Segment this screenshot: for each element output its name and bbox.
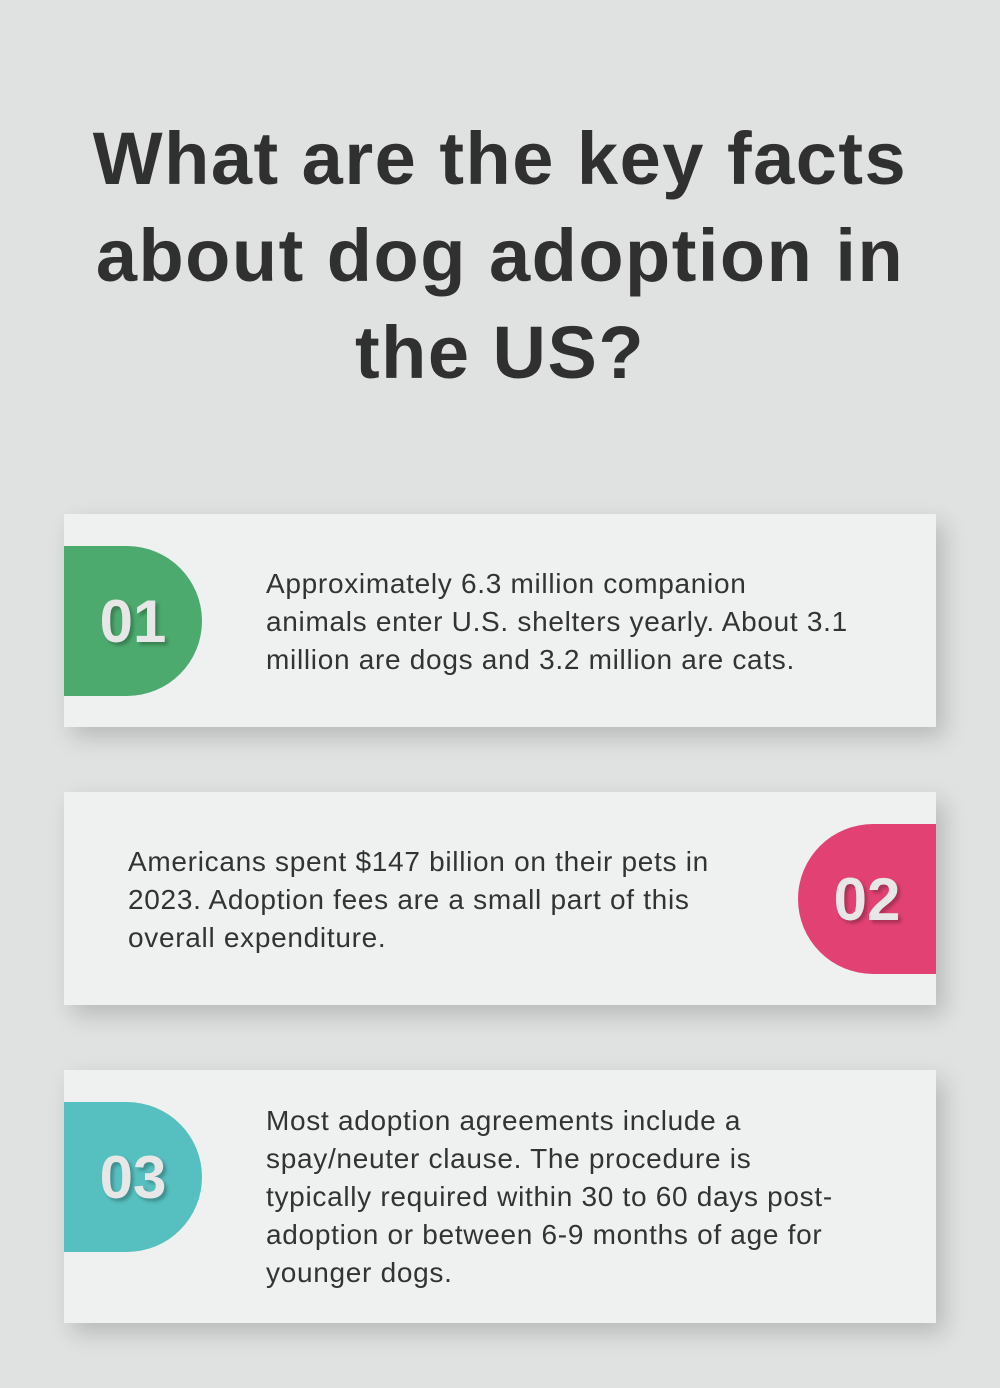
text 3: Most adoption agreements include a	[266, 1105, 741, 1136]
text 3: spay/neuter clause. The procedure is	[266, 1143, 751, 1174]
badge 03: 03	[100, 1144, 166, 1210]
panel: fact 1	[64, 514, 936, 727]
badge 02: 02	[834, 866, 900, 932]
text 3	[266, 1105, 833, 1288]
text 1: million are dogs and 3.2 million are cats.	[266, 644, 795, 675]
badge 03	[64, 1102, 202, 1252]
text 1	[266, 568, 848, 675]
badge 01: 01	[100, 588, 166, 654]
panel: fact 3	[64, 1070, 936, 1323]
text 2: Americans spent $147 billion on their pets in	[128, 846, 709, 877]
title: the US?	[355, 311, 645, 394]
title: about dog adoption in	[96, 214, 904, 297]
text 3: adoption or between 6-9 months of age for	[266, 1219, 822, 1250]
text 2: 2023. Adoption fees are a small part of this	[128, 884, 690, 915]
badge 01	[64, 546, 202, 696]
text 1: Approximately 6.3 million companion	[266, 568, 746, 599]
text 2: overall expenditure.	[128, 922, 386, 953]
title	[92, 117, 907, 394]
panel: fact 2	[64, 792, 936, 1005]
title: What are the key facts	[93, 117, 907, 200]
badge 02	[798, 824, 936, 974]
text 3: typically required within 30 to 60 days post-	[266, 1181, 833, 1212]
text 3: younger dogs.	[266, 1257, 453, 1288]
text 2	[128, 846, 709, 953]
text 1: animals enter U.S. shelters yearly. About 3.1	[266, 606, 848, 637]
